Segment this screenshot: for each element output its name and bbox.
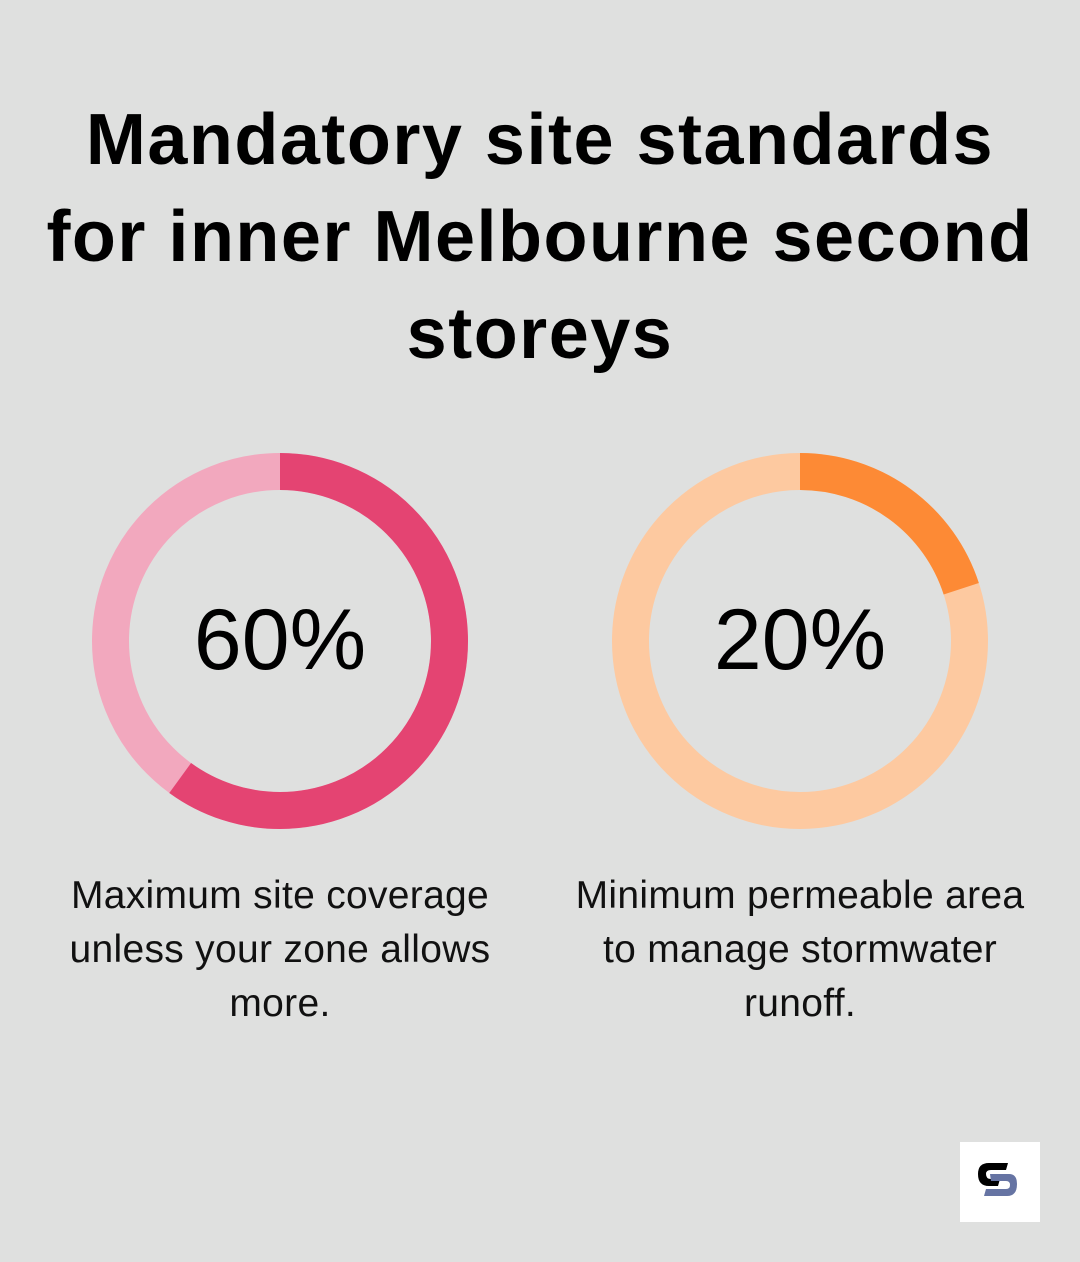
caption: site coverage: more. xyxy=(229,982,331,1025)
caption: permeable area: to manage stormwater xyxy=(603,928,997,971)
donut chart: 20% xyxy=(612,453,988,829)
caption: site coverage: unless your zone allows xyxy=(70,928,490,971)
logo xyxy=(960,1142,1040,1222)
title: storeys xyxy=(407,294,673,374)
caption: permeable area xyxy=(576,874,1024,1025)
title: for inner Melbourne second xyxy=(46,197,1034,277)
donut chart: 60%: 60% xyxy=(194,592,366,688)
caption: site coverage: Maximum site coverage xyxy=(71,874,489,917)
donut chart: 60% xyxy=(92,453,468,829)
title xyxy=(46,100,1034,374)
donut chart: 20%: 20% xyxy=(714,592,886,688)
title: Mandatory site standards xyxy=(86,100,994,180)
caption: site coverage xyxy=(70,874,490,1025)
caption: permeable area: Minimum permeable area xyxy=(576,874,1024,917)
caption: permeable area: runoff. xyxy=(744,982,856,1025)
